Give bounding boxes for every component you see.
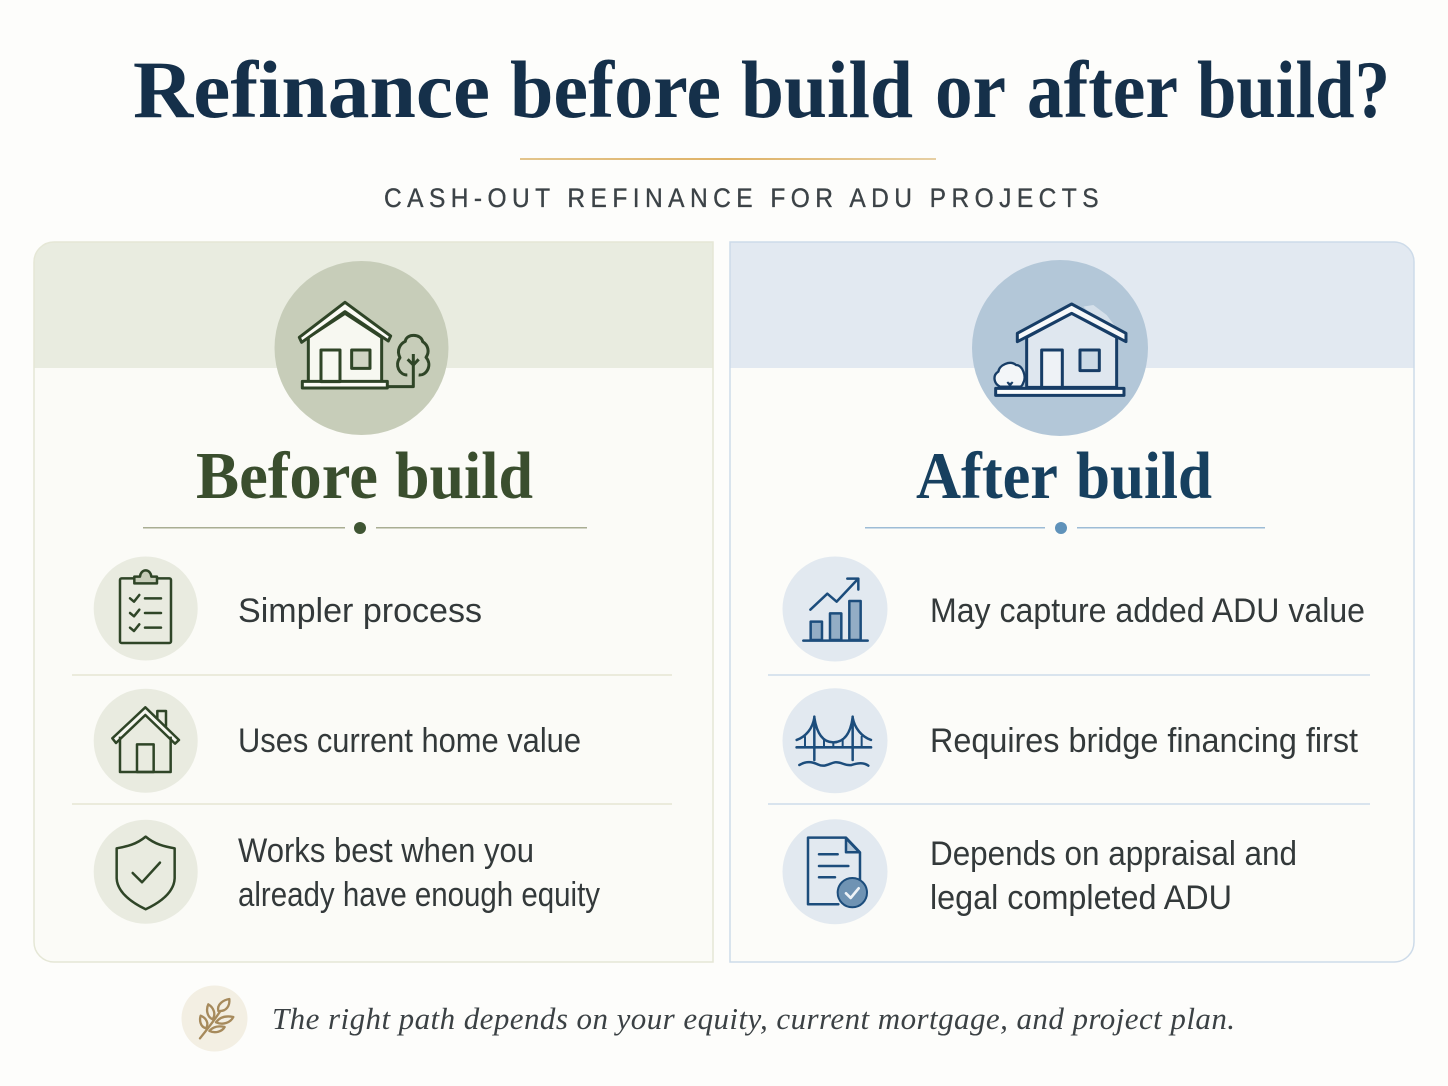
- item: uses current home value: [94, 689, 581, 793]
- text: Works best when you: [238, 832, 534, 870]
- text: [238, 832, 600, 914]
- heading: after build: build: [1076, 439, 1212, 513]
- item: depends on appraisal: [782, 819, 1297, 924]
- text: Uses current home value: [238, 722, 581, 760]
- icon: document with check: [782, 819, 888, 924]
- title: build: [741, 44, 913, 135]
- title: or: [935, 44, 1006, 135]
- item: simpler process: [94, 556, 482, 660]
- icon: rising bar chart: [782, 556, 888, 662]
- item: requires bridge financing first: [782, 688, 1359, 793]
- icon: shield check: [94, 820, 198, 924]
- title: Refinance: [133, 44, 490, 135]
- icon: bridge: [782, 688, 888, 793]
- heading: before build: [196, 439, 533, 513]
- panel: after build: [730, 242, 1414, 962]
- icon: house with tree: [274, 261, 448, 435]
- footer text: The right path depends on your equity, current mortgage, and project plan.: [272, 1001, 1235, 1036]
- item: works best with equity: [94, 820, 600, 924]
- text: May capture added ADU value: [930, 592, 1365, 630]
- heading: before build: Before: [196, 439, 378, 513]
- title: before: [510, 44, 721, 135]
- subtitle: CASH-OUT REFINANCE FOR ADU PROJECTS: [384, 183, 1104, 213]
- text: already have enough equity: [238, 876, 600, 914]
- heading: after build: [916, 439, 1212, 513]
- text: legal completed ADU: [930, 879, 1232, 917]
- icon: house with bush: [972, 260, 1148, 436]
- footer note: [182, 986, 1235, 1052]
- text: Simpler process: [238, 592, 482, 630]
- icon: clipboard checklist: [94, 556, 198, 660]
- title: [133, 44, 1390, 135]
- title: after: [1027, 44, 1178, 135]
- heading: before build: build: [395, 439, 533, 513]
- icon: house: [94, 689, 198, 793]
- text: Depends on appraisal and: [930, 835, 1297, 873]
- icon: leaf sprig: [182, 986, 248, 1052]
- heading rule: [143, 522, 587, 534]
- title: build?: [1197, 44, 1390, 135]
- text: [930, 835, 1297, 917]
- item: may capture added ADU value: [782, 556, 1365, 662]
- text: Requires bridge financing first: [930, 722, 1359, 760]
- heading: after build: After: [916, 439, 1058, 513]
- heading rule: [865, 522, 1265, 534]
- panel: before build: [34, 242, 713, 962]
